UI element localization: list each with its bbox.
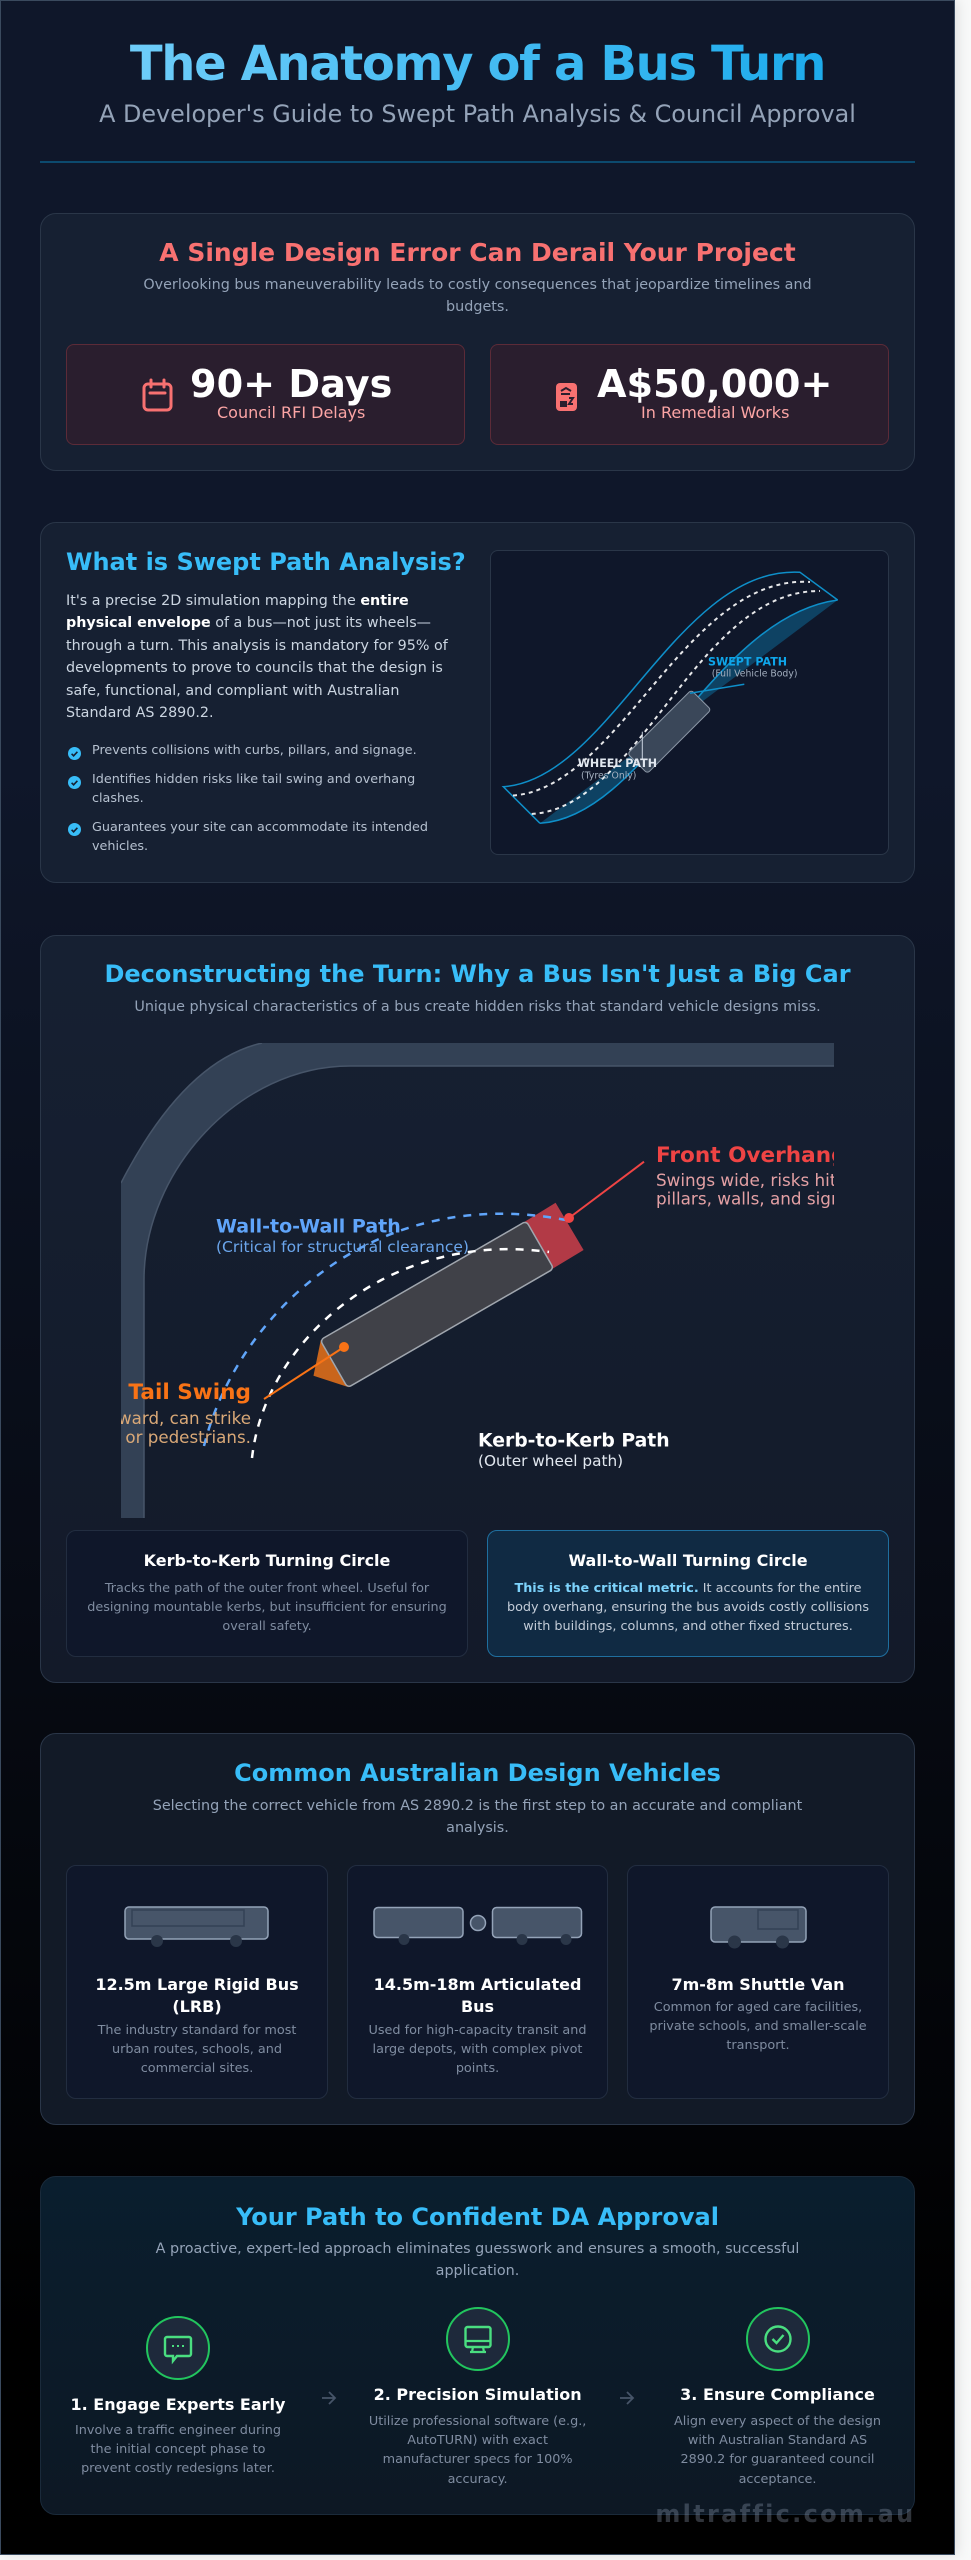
intro text — [143, 277, 812, 315]
icon: shuttle van — [710, 1906, 807, 1948]
wheel label — [578, 757, 657, 782]
wheel label: WHEEL PATH — [578, 757, 657, 770]
icon: calendar — [142, 378, 172, 412]
intro text: A proactive, expert-led approach eliminates guesswork and ensures a smooth, successful — [156, 2241, 799, 2257]
stat: cost — [490, 344, 889, 445]
step text: Align every aspect of the design — [674, 2414, 881, 2429]
vehicle title: Bus — [461, 1997, 494, 2016]
wall-to-wall path — [204, 1214, 571, 1446]
heading: Deconstructing the Turn: Why a Bus Isn't Just a Big Car — [104, 960, 851, 988]
body text: developments to prove to councils that the design is — [66, 660, 443, 676]
body text: It's a precise 2D simulation mapping the entire — [66, 593, 409, 609]
wheel label: (Tyres Only) — [581, 770, 636, 782]
icon: check 3 — [68, 823, 81, 836]
arrow 2 — [620, 2392, 634, 2404]
intro text: budgets. — [446, 299, 509, 315]
card text: overall safety. — [222, 1619, 312, 1634]
vehicle text: points. — [456, 2061, 499, 2076]
vehicle card: rigid bus — [66, 1865, 328, 2099]
step title: 1. Engage Experts Early — [71, 2395, 285, 2414]
kerb-to-kerb label — [478, 1430, 670, 1470]
road kerb — [121, 1043, 834, 1518]
icon: rigid bus — [124, 1906, 269, 1947]
step text: Utilize professional software (e.g., — [369, 2414, 586, 2429]
step 2 — [369, 2307, 586, 2487]
icon: chat — [146, 2316, 210, 2380]
step 3 — [674, 2307, 881, 2487]
panel: deconstructing the turn — [40, 935, 915, 1683]
check text 3 — [92, 820, 428, 854]
card text: This is the critical metric. It accounts for the entire — [514, 1581, 862, 1596]
vehicle title — [95, 1975, 299, 2016]
vehicle text: commercial sites. — [141, 2061, 253, 2076]
icon: check 1 — [68, 747, 81, 760]
heading: What is Swept Path Analysis? — [66, 548, 466, 576]
swept label — [708, 656, 797, 680]
body text: safe, functional, and compliant with Australian — [66, 683, 400, 699]
step text: 2890.2 for guaranteed council — [680, 2452, 874, 2467]
bus — [320, 1221, 554, 1388]
check text 2: Identifies hidden risks like tail swing and overhang — [92, 772, 415, 787]
checklist — [68, 743, 428, 854]
tail swing label — [27, 1380, 251, 1447]
vehicle text: urban routes, schools, and — [112, 2042, 282, 2057]
vehicle title — [374, 1975, 581, 2016]
front overhang — [525, 1203, 584, 1269]
vehicle card: articulated bus — [347, 1865, 608, 2099]
wheel callout line — [641, 732, 643, 760]
body text: physical envelope of a bus—not just its wheels— — [66, 615, 431, 631]
heading: Your Path to Confident DA Approval — [236, 2203, 719, 2231]
intro text: Selecting the correct vehicle from AS 2890.2 is the first step to an accurate and compliant — [153, 1798, 802, 1814]
intro text: Overlooking bus maneuverability leads to costly consequences that jeopardize timelines and — [143, 277, 812, 293]
vehicle text — [649, 2000, 867, 2053]
body text: Standard AS 2890.2. — [66, 705, 214, 721]
kerb-to-kerb label: Kerb-to-Kerb Path — [478, 1430, 670, 1452]
stat label: Council RFI Delays — [217, 403, 365, 422]
vehicle text: transport. — [726, 2038, 790, 2053]
card text: with buildings, columns, and other fixed structures. — [523, 1619, 853, 1634]
panel: path to approval — [40, 2176, 915, 2515]
icon: monitor — [446, 2307, 510, 2371]
body text — [66, 593, 448, 721]
step text: Involve a traffic engineer during — [75, 2423, 281, 2438]
check text 3: vehicles. — [92, 839, 148, 854]
step text: accuracy. — [448, 2472, 508, 2487]
stat: days — [66, 344, 465, 445]
step text — [369, 2414, 586, 2487]
panel: design vehicles — [40, 1733, 915, 2125]
swept path diagram — [490, 550, 889, 855]
card text — [507, 1581, 869, 1634]
vehicle title: 12.5m Large Rigid Bus — [95, 1975, 299, 1994]
wall-to-wall label: (Critical for structural clearance) — [216, 1238, 469, 1256]
wall-to-wall label: Wall-to-Wall Path — [216, 1216, 401, 1238]
intro text — [156, 2241, 799, 2279]
vehicle text: private schools, and smaller-scale — [649, 2019, 867, 2034]
card text: body overhang, ensuring the bus avoids costly collisions — [507, 1600, 869, 1615]
vehicle text: Common for aged care facilities, — [654, 2000, 862, 2015]
icon: check 2 — [68, 776, 81, 789]
card text — [87, 1581, 447, 1634]
vehicle text: The industry standard for most — [98, 2023, 296, 2038]
swept callout line — [690, 684, 744, 693]
front callout — [564, 1162, 644, 1223]
vehicle card: shuttle van — [627, 1865, 889, 2099]
body text: through a turn. This analysis is mandatory for 95% of — [66, 638, 448, 654]
vehicle title: 7m-8m Shuttle Van — [671, 1975, 845, 1994]
step text: acceptance. — [739, 2472, 816, 2487]
step text: with Australian Standard AS — [688, 2433, 867, 2448]
step text: the initial concept phase to — [91, 2442, 265, 2457]
tail swing label: or pedestrians. — [125, 1427, 251, 1447]
heading: A Single Design Error Can Derail Your Project — [159, 238, 796, 267]
kerb-to-kerb path — [252, 1249, 549, 1458]
icon: articulated bus — [373, 1906, 582, 1945]
card text: designing mountable kerbs, but insufficient for ensuring — [87, 1600, 447, 1615]
card title: Kerb-to-Kerb Turning Circle — [144, 1551, 390, 1570]
wheel paths — [513, 582, 820, 814]
step text: prevent costly redesigns later. — [81, 2461, 275, 2476]
intro text: application. — [436, 2263, 519, 2279]
icon: money — [556, 383, 577, 411]
tail callout — [264, 1342, 349, 1399]
tail swing — [314, 1340, 349, 1387]
check text 3: Guarantees your site can accommodate its intended — [92, 820, 428, 835]
turn diagram — [121, 1043, 834, 1518]
wall-to-wall label — [216, 1216, 469, 1256]
step 1 — [71, 2316, 286, 2476]
panel: swept path explainer — [40, 522, 915, 883]
swept label: SWEPT PATH — [708, 656, 787, 668]
step text — [75, 2423, 281, 2476]
step text: AutoTURN) with exact — [407, 2433, 548, 2448]
arrow 1 — [322, 2392, 336, 2404]
intro text: analysis. — [446, 1820, 509, 1836]
tail swing label: Tail Swing — [128, 1380, 251, 1405]
step title: 3. Ensure Compliance — [680, 2385, 875, 2404]
vehicle title: 14.5m-18m Articulated — [374, 1975, 581, 1994]
icon: check circle — [746, 2307, 810, 2371]
bus outline — [628, 690, 711, 773]
title: The Anatomy of a Bus Turn — [130, 36, 825, 92]
stat number: A$50,000+ — [597, 363, 832, 407]
vehicle text — [368, 2023, 586, 2076]
title — [1, 32, 954, 96]
check text 2 — [92, 772, 415, 806]
vehicle text: Used for high-capacity transit and — [368, 2023, 586, 2038]
card: kerb-to-kerb — [66, 1530, 468, 1657]
card title: Wall-to-Wall Turning Circle — [568, 1551, 808, 1570]
intro text — [153, 1798, 802, 1836]
subtitle: A Developer's Guide to Swept Path Analysis & Council Approval — [99, 100, 856, 128]
stat label: In Remedial Works — [641, 403, 789, 422]
swept envelope — [503, 572, 838, 823]
divider — [40, 161, 915, 163]
swept label: (Full Vehicle Body) — [712, 668, 797, 680]
step text: manufacturer specs for 100% — [383, 2452, 573, 2467]
step title: 2. Precision Simulation — [374, 2385, 582, 2404]
check text 1: Prevents collisions with curbs, pillars, and signage. — [92, 743, 417, 758]
front overhang label — [656, 1143, 878, 1208]
vehicle text — [98, 2023, 296, 2076]
card text: Tracks the path of the outer front wheel. Useful for — [105, 1581, 429, 1596]
vehicle text: large depots, with complex pivot — [373, 2042, 582, 2057]
step text — [674, 2414, 881, 2487]
heading: Common Australian Design Vehicles — [234, 1759, 721, 1787]
watermark: mltraffic.com.au — [655, 2500, 916, 2528]
intro text: Unique physical characteristics of a bus create hidden risks that standard vehicle designs miss. — [134, 999, 821, 1015]
card: wall-to-wall — [487, 1530, 889, 1657]
panel: cost of error — [40, 213, 915, 471]
kerb-to-kerb label: (Outer wheel path) — [478, 1452, 623, 1470]
check text 2: clashes. — [92, 791, 144, 806]
vehicle title: (LRB) — [172, 1997, 222, 2016]
stat number: 90+ Days — [190, 363, 392, 407]
